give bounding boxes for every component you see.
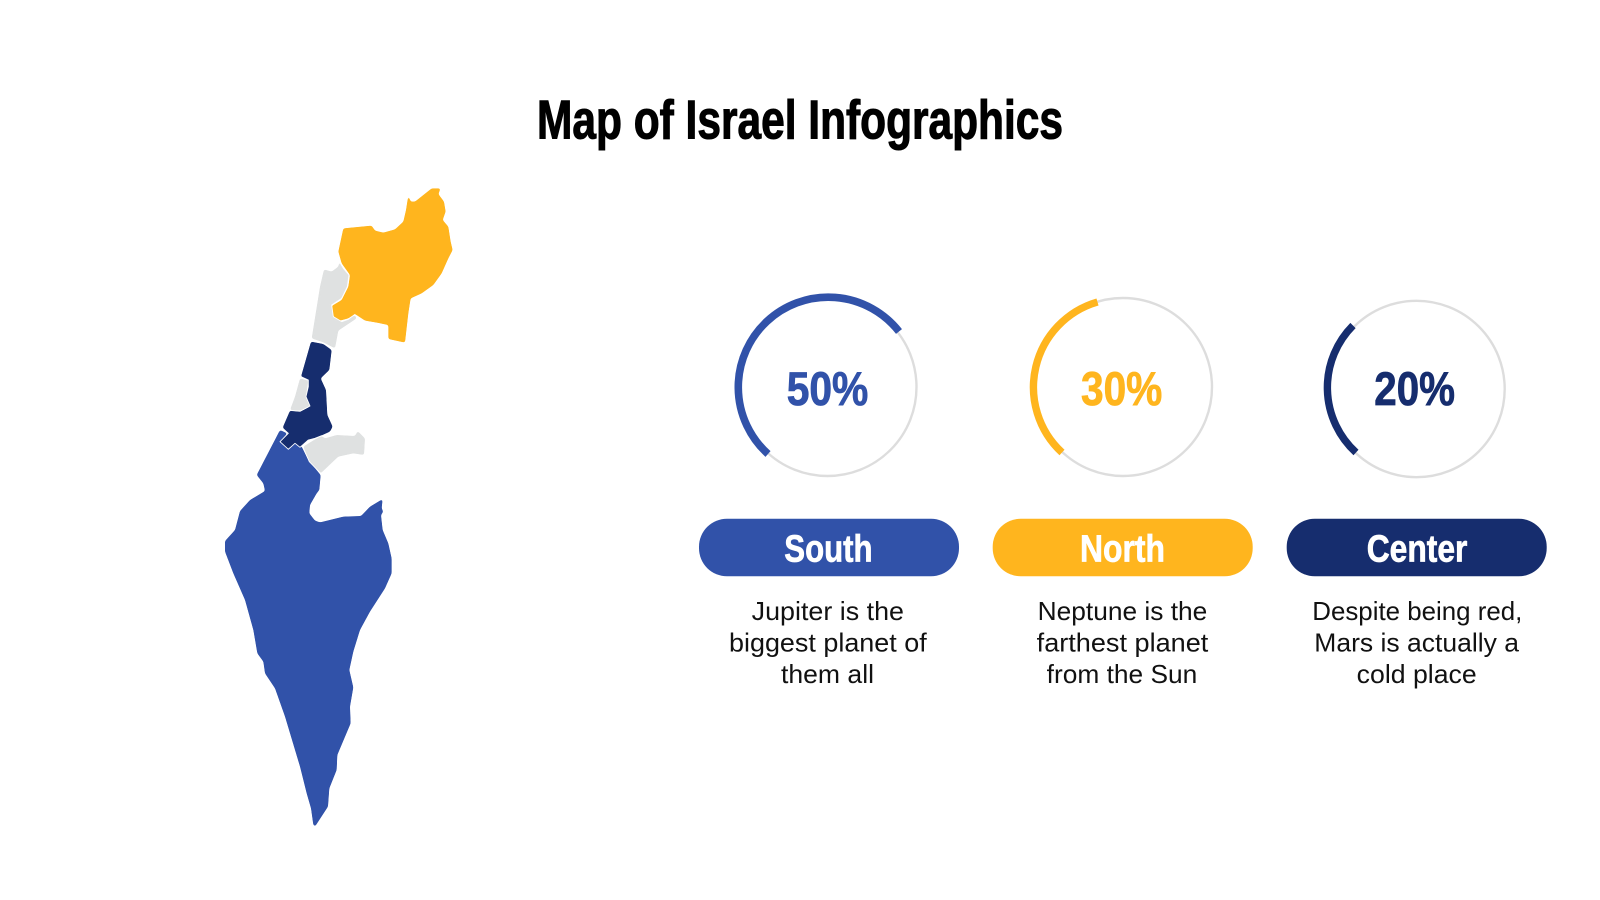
- donut: 50%: [738, 297, 916, 476]
- text: north description: Neptune is the: [1038, 596, 1207, 626]
- pill: center: [1287, 519, 1547, 576]
- text: south description: Jupiter is the: [752, 596, 904, 626]
- panel: north: [993, 298, 1253, 689]
- pill: north: North: [1080, 529, 1165, 571]
- text: center description: Despite being red,: [1312, 596, 1522, 626]
- donut: 30%: [1033, 298, 1212, 476]
- text: south description: [729, 596, 928, 689]
- text: south description: them all: [781, 659, 874, 689]
- text: north description: [1037, 596, 1209, 689]
- text: north description: from the Sun: [1047, 659, 1197, 689]
- region: jerusalem: [303, 431, 365, 473]
- panel: center: [1287, 301, 1547, 689]
- panel: south: [699, 297, 959, 689]
- pill: north: [993, 519, 1253, 576]
- region: center: [280, 342, 333, 449]
- text: north description: farthest planet: [1037, 628, 1209, 658]
- map of Israel: [225, 188, 453, 827]
- region: south: [225, 430, 392, 827]
- pill: south: [699, 519, 959, 576]
- value: 20%: 20%: [1374, 362, 1455, 415]
- value: 50%: 50%: [787, 362, 868, 415]
- region: haifa: [312, 262, 357, 348]
- pill: center: Center: [1367, 529, 1468, 571]
- value: 30%: 30%: [1081, 362, 1162, 415]
- title: Map of Israel Infographics: [537, 88, 1063, 150]
- text: south description: biggest planet of: [729, 628, 928, 658]
- region: tel aviv: [290, 378, 310, 411]
- text: center description: [1312, 596, 1522, 689]
- text: center description: cold place: [1357, 659, 1477, 689]
- text: center description: Mars is actually a: [1314, 628, 1520, 658]
- pill: south: South: [784, 529, 873, 571]
- region: north: [332, 188, 453, 343]
- donut: 20%: [1327, 301, 1505, 477]
